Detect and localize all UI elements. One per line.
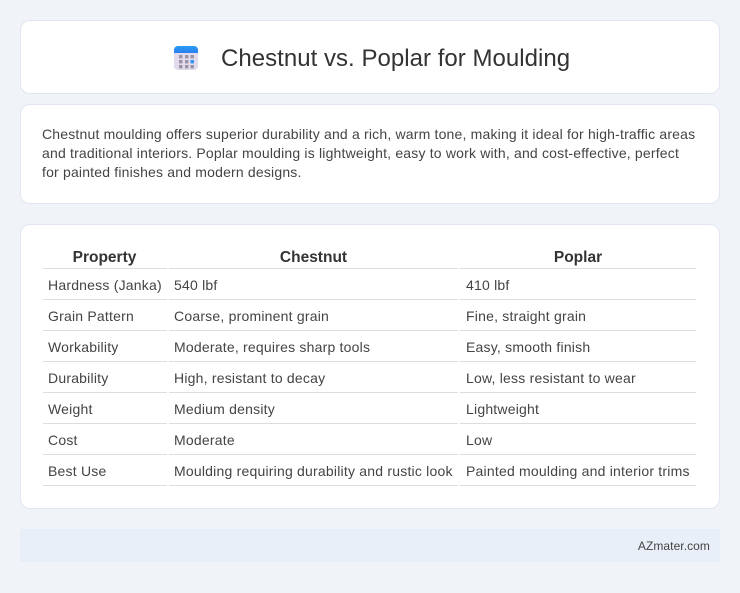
footer text: AZmater.com xyxy=(638,539,710,553)
icon: calendar xyxy=(174,46,198,70)
comparison table: Workability xyxy=(48,339,119,355)
summary text: Chestnut moulding offers superior durability and a rich, warm tone, making it ideal for high-traffic areas xyxy=(42,126,695,142)
panel: summary card xyxy=(20,104,720,204)
comparison table: Easy, smooth finish xyxy=(466,339,590,355)
comparison table: 410 lbf xyxy=(466,277,510,293)
comparison table: Poplar xyxy=(554,249,602,266)
comparison table: Durability xyxy=(48,370,108,386)
comparison table: Painted moulding and interior trims xyxy=(466,463,690,479)
summary text: and traditional interiors. Poplar moulding is lightweight, easy to work with, and cost-effective, perfect xyxy=(42,145,679,161)
comparison table: Fine, straight grain xyxy=(466,308,586,324)
comparison table: Best Use xyxy=(48,463,106,479)
title: Chestnut vs. Poplar for Moulding xyxy=(221,45,570,72)
comparison table: Low, less resistant to wear xyxy=(466,370,636,386)
comparison table: Property xyxy=(73,249,136,266)
comparison table: Weight xyxy=(48,401,93,417)
panel: title card xyxy=(20,20,720,94)
summary text: for painted finishes and modern designs. xyxy=(42,164,302,180)
panel: comparison table card xyxy=(20,224,720,509)
comparison table: Hardness (Janka) xyxy=(48,277,162,293)
comparison table: Cost xyxy=(48,432,78,448)
comparison table: Medium density xyxy=(174,401,275,417)
comparison table: Coarse, prominent grain xyxy=(174,308,329,324)
summary text xyxy=(42,126,695,180)
comparison table: High, resistant to decay xyxy=(174,370,325,386)
comparison table: Moulding requiring durability and rustic look xyxy=(174,463,453,479)
comparison table: Low xyxy=(466,432,492,448)
comparison table: Chestnut xyxy=(280,249,347,266)
footer bar xyxy=(20,529,720,562)
comparison table: Moderate xyxy=(174,432,235,448)
comparison table: 540 lbf xyxy=(174,277,218,293)
comparison table: Lightweight xyxy=(466,401,539,417)
comparison table: Grain Pattern xyxy=(48,308,134,324)
comparison table: Moderate, requires sharp tools xyxy=(174,339,370,355)
